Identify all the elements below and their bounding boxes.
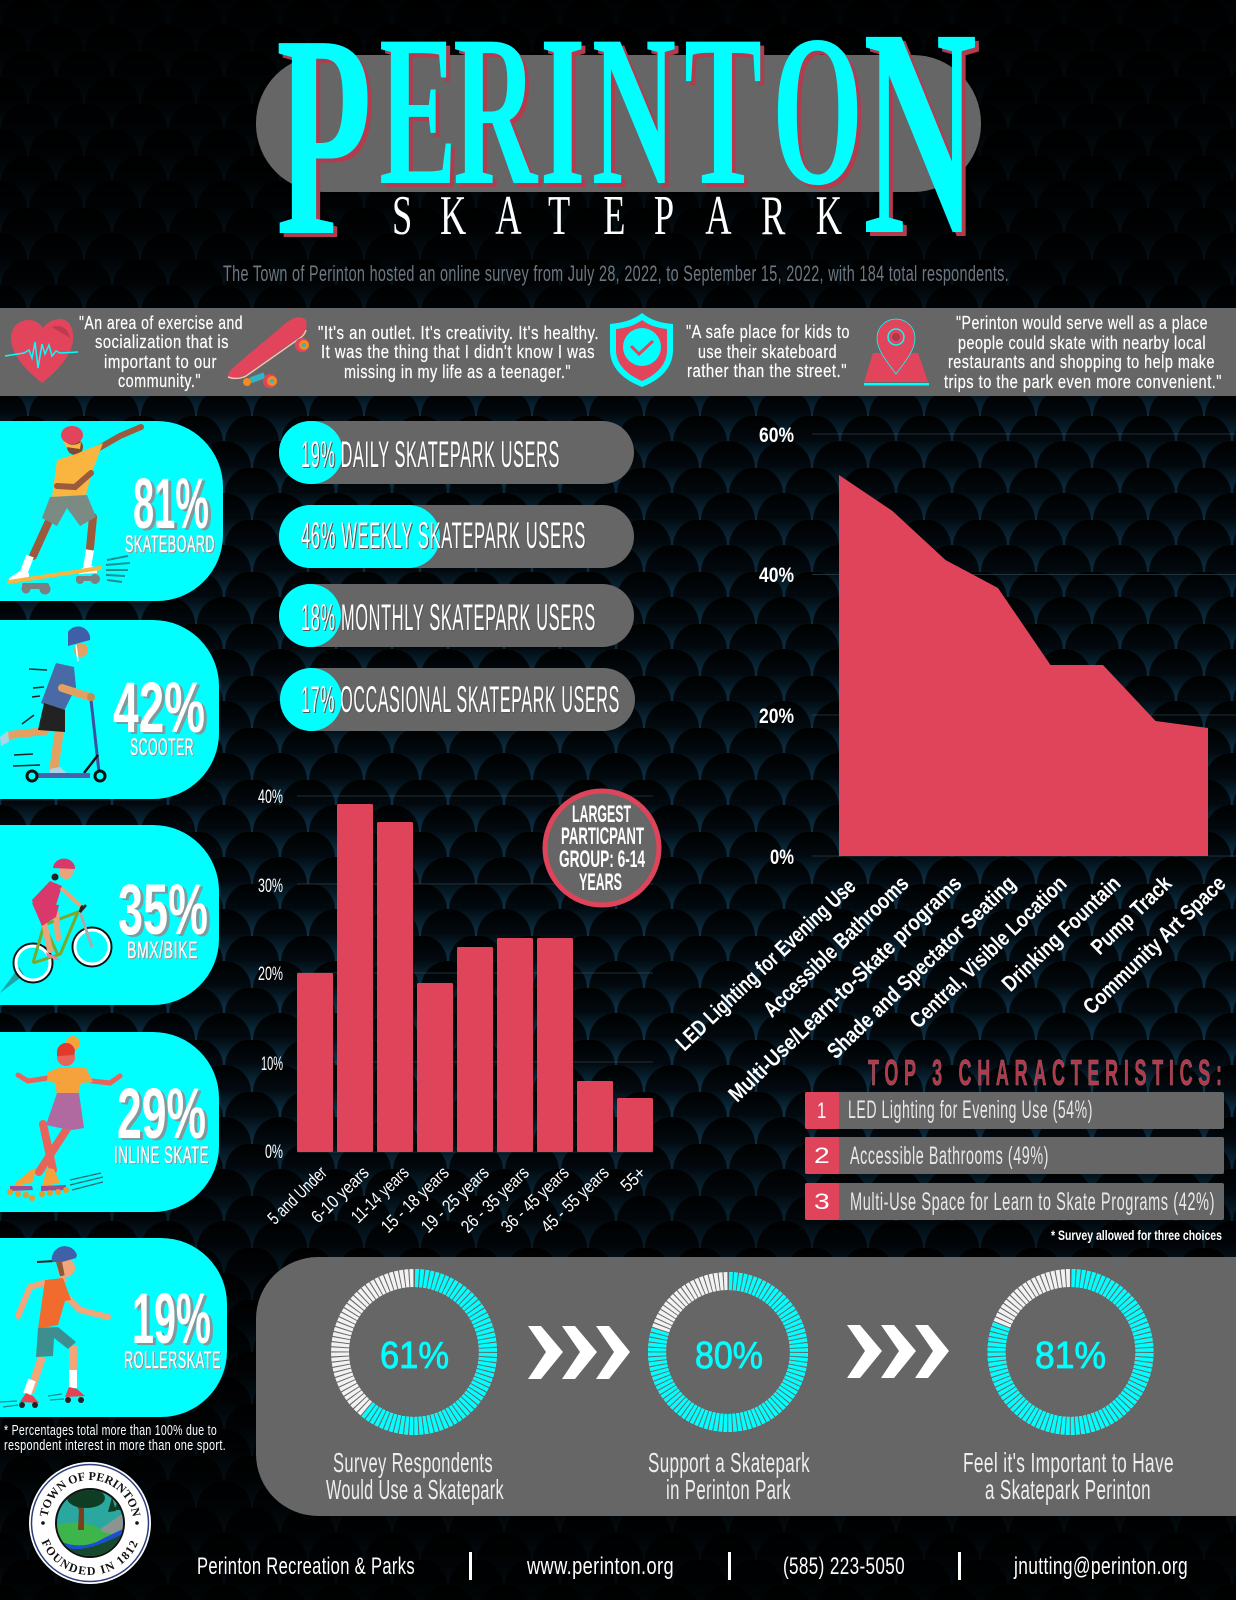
panel: scooter card <box>0 620 219 799</box>
footnote: percentages: respondent interest in more than one sport. <box>4 1438 226 1454</box>
callout: largest participant group: GROUP: 6-14 <box>559 846 645 873</box>
row 2 <box>805 1137 1224 1174</box>
caption 3 <box>963 1447 1174 1505</box>
stat: 29% inline skate: INLINE SKATE <box>114 1142 209 1169</box>
text: 17% OCCASIONAL SKATEPARK USERS <box>301 679 620 720</box>
footer contact bar <box>197 1552 1188 1580</box>
stat: 42% scooter: 42% <box>113 669 205 748</box>
bar chart: participant ages <box>258 787 653 1237</box>
y axis labels: 30% <box>258 876 283 897</box>
figure: skateboarder <box>9 426 141 594</box>
stat: 35% BMX/bike <box>118 871 208 964</box>
footer contact bar: Perinton Recreation & Parks <box>197 1553 415 1580</box>
x axis labels: 11-14 years <box>347 1162 413 1227</box>
area chart: desired amenities <box>671 424 1236 1107</box>
footnote: percentages <box>4 1423 226 1454</box>
quote 3: use their skateboard <box>698 342 837 362</box>
donut: 61% would use: 61% <box>380 1335 449 1377</box>
panel: inline skate card <box>0 1032 219 1212</box>
stat: 42% scooter: SCOOTER <box>130 734 194 761</box>
quote 4 <box>944 313 1222 392</box>
quote 3: "A safe place for kids to <box>686 322 850 342</box>
y axis labels: 10% <box>261 1054 283 1075</box>
pill: daily users <box>279 421 634 484</box>
y axis labels <box>759 424 794 869</box>
x axis labels: 6-10 years <box>307 1162 373 1227</box>
panel: usage frequency pills <box>279 421 635 731</box>
figure: scooter rider <box>0 626 105 781</box>
x axis labels <box>264 1162 650 1237</box>
panel: support statistics <box>256 1257 1236 1516</box>
caption 2: Support a Skatepark <box>648 1447 810 1478</box>
figure: rollerskater <box>0 1246 108 1408</box>
pill: monthly users <box>279 584 634 647</box>
stat: 42% scooter <box>113 669 205 761</box>
caption 1 <box>326 1447 504 1505</box>
x axis labels: 15 - 18 years <box>377 1162 453 1237</box>
figure: cyclist <box>0 859 112 993</box>
callout: largest participant group: LARGEST <box>572 801 631 828</box>
pill: occasional users <box>280 668 635 731</box>
row 1: 1 <box>817 1098 827 1123</box>
figure: inline skater <box>7 1036 120 1201</box>
x axis labels: LED Lighting for Evening Use <box>671 873 860 1055</box>
y axis labels <box>258 787 283 1163</box>
panel: bike card <box>0 825 219 1005</box>
caption 2: in Perinton Park <box>666 1474 791 1505</box>
icon: heart <box>5 319 78 383</box>
donut: 80% support <box>657 1281 799 1423</box>
row 3: 3 <box>814 1189 831 1214</box>
y axis labels: 0% <box>265 1142 283 1163</box>
row 1 <box>805 1092 1224 1129</box>
pill: weekly users: 46% WEEKLY SKATEPARK USERS <box>301 515 586 556</box>
callout: largest participant group: PARTICPANT <box>561 823 644 850</box>
icon: shield <box>610 313 673 387</box>
title block <box>256 0 981 297</box>
donut: 80% support: 80% <box>695 1335 763 1377</box>
stat: 19% rollerskate: ROLLERSKATE <box>124 1347 221 1374</box>
y axis labels: 20% <box>258 964 283 985</box>
panel: usage frequency pills: 18% MONTHLY SKATEPARK USERS <box>301 597 596 638</box>
x axis labels: Pump Track <box>1086 870 1177 959</box>
stat: 35% BMX/bike: BMX/BIKE <box>127 937 198 964</box>
caption 2 <box>648 1447 810 1505</box>
stat: 29% inline skate: 29% <box>117 1075 206 1154</box>
quote 3: rather than the street." <box>687 361 847 381</box>
footnote: percentages: * Percentages total more than 100% due to <box>4 1423 217 1439</box>
x axis labels <box>671 870 1230 1107</box>
panel: skateboard card <box>0 421 223 601</box>
x axis labels: 19 - 25 years <box>417 1162 493 1237</box>
panel: quotes band <box>0 308 1236 396</box>
logo: town seal <box>29 1462 151 1584</box>
subtitle: skatepark: SKATEPARK <box>392 185 842 247</box>
quote 1: socialization that is <box>95 332 229 352</box>
x axis labels: 26 - 35 years <box>457 1162 533 1237</box>
logo bottom text: FOUNDED IN 1812 <box>41 1538 138 1576</box>
row 3 <box>805 1183 1224 1220</box>
logo top text: TOWN OF PERINTON <box>40 1472 140 1516</box>
y axis labels: 20% <box>759 705 794 728</box>
arrows: chevrons 1 <box>528 1326 630 1379</box>
footer contact bar: www.perinton.org <box>526 1553 674 1580</box>
bars <box>297 804 653 1152</box>
stat: 29% inline skate <box>114 1075 209 1169</box>
x axis labels: 45 - 55 years <box>537 1162 613 1237</box>
panel: rollerskate card <box>0 1238 227 1417</box>
x axis labels: Multi-Use/Learn-to-Skate programs <box>723 871 966 1107</box>
pill: weekly users <box>279 505 634 568</box>
quote 1: "An area of exercise and <box>79 313 243 333</box>
title backing pill <box>256 55 981 192</box>
x axis labels: Shade and Spectator Seating <box>822 871 1020 1064</box>
x axis labels: Drinking Fountain <box>997 871 1125 996</box>
donut: 81% important <box>996 1278 1144 1426</box>
y axis labels: 40% <box>759 564 794 587</box>
area series <box>839 475 1208 856</box>
quote 1 <box>79 313 243 391</box>
row 2: 2 <box>814 1143 831 1168</box>
stat: 81% skateboard <box>125 465 215 558</box>
quote 1: community." <box>118 371 201 391</box>
panel: top 3 characteristics <box>805 1053 1224 1243</box>
x axis labels: Central, Visible Location <box>904 871 1071 1033</box>
quote 2: It was the thing that I didn't know I was <box>321 342 595 362</box>
icon: skateboard <box>228 317 309 388</box>
x axis labels: 55+ <box>616 1162 650 1196</box>
stat: 19% rollerskate: 19% <box>132 1280 211 1359</box>
quote 2: "It's an outlet. It's creativity. It's healthy. <box>318 323 599 343</box>
quote 2 <box>318 323 599 382</box>
heading: TOP 3 CHARACTERISTICS: <box>868 1053 1222 1094</box>
stat: 19% rollerskate <box>124 1280 221 1374</box>
x axis labels: Accessible Bathrooms <box>758 871 913 1022</box>
y axis labels: 40% <box>258 787 283 808</box>
caption 1: Survey Respondents <box>333 1447 493 1478</box>
stat: 35% BMX/bike: 35% <box>118 871 208 950</box>
callout: largest participant group: YEARS <box>579 869 622 896</box>
x axis labels: 36 - 45 years <box>497 1162 573 1237</box>
row 2: Accessible Bathrooms (49%) <box>850 1142 1049 1170</box>
icon: map pin <box>864 319 929 386</box>
x axis labels: 5 and Under <box>264 1162 331 1228</box>
stat: 81% skateboard: 81% <box>133 465 209 544</box>
arrows: chevrons 2 <box>847 1325 949 1378</box>
donut: 81% important: 81% <box>1035 1335 1106 1377</box>
caption 1: Would Use a Skatepark <box>326 1474 504 1505</box>
footer contact bar: (585) 223-5050 <box>783 1553 905 1580</box>
pill: daily users: 19% DAILY SKATEPARK USERS <box>301 434 560 475</box>
donut: 61% would use <box>340 1278 488 1426</box>
title: Perinton <box>276 0 977 297</box>
quote 2: missing in my life as a teenager." <box>344 362 571 382</box>
y axis labels: 60% <box>759 424 794 447</box>
stat: 81% skateboard: SKATEBOARD <box>125 531 215 558</box>
callout: largest participant group <box>545 791 659 905</box>
quote 1: important to our <box>104 352 217 372</box>
quote 3 <box>686 322 850 381</box>
y axis labels: 0% <box>770 846 794 869</box>
